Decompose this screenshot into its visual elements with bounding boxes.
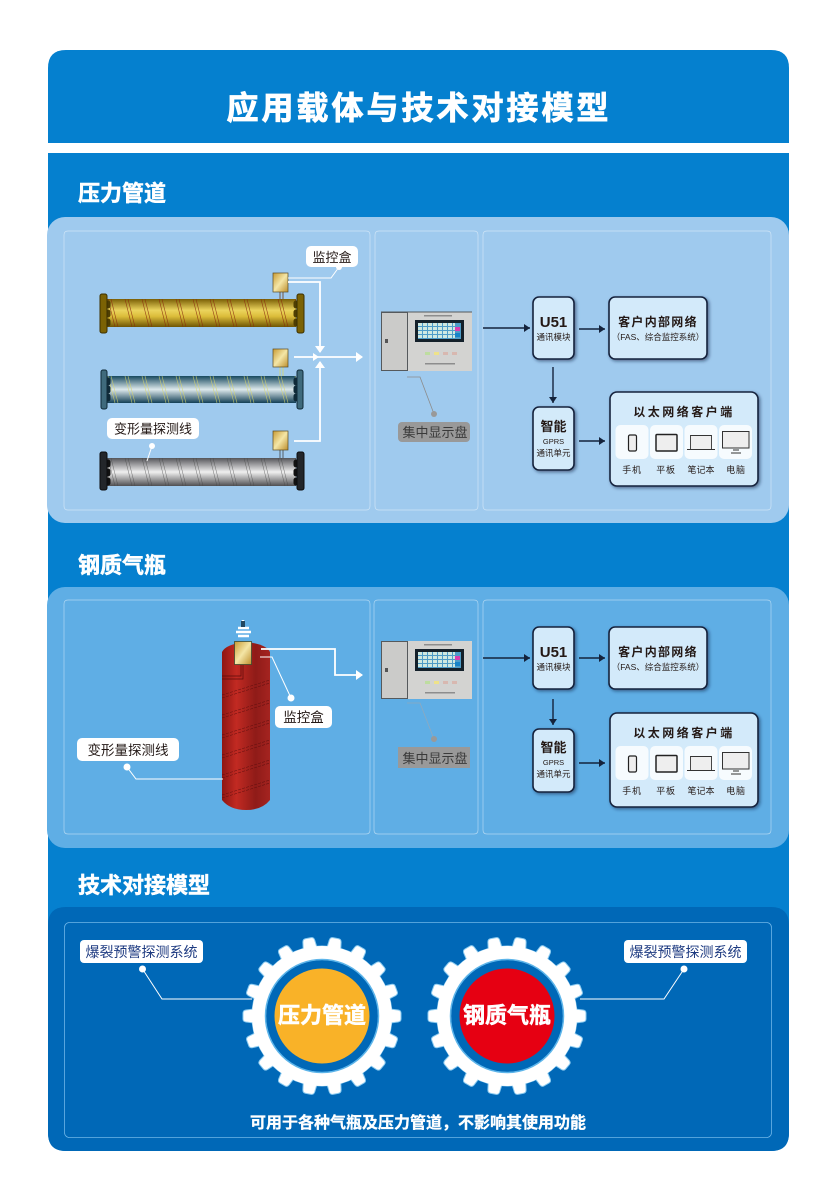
device labels: 笔记本 [687,785,715,796]
smart GPRS unit [533,407,574,470]
U51 module: 通讯模块 [536,332,571,342]
icon: tablet [656,434,677,451]
callout: deformation wire: 变形量探测线 [114,422,192,436]
callout: monitor box: 监控盒 [312,250,352,265]
icon: phone [628,756,636,772]
wiring arrow to display [261,649,362,675]
icon: laptop [687,756,715,770]
central display panel [381,641,472,699]
callout: central display [398,703,470,768]
U51 module: 通讯模块 [536,662,571,672]
customer internal network [609,297,707,359]
callout: monitor box: 监控盒 [283,709,324,725]
steel pipe [100,452,304,490]
callout: deformation wire [107,418,199,461]
gear: pressure pipe [243,937,401,1095]
device labels: 平板 [656,785,676,796]
callout: central display: 集中显示盘 [402,751,468,766]
U51 module: U51 [540,644,567,661]
callout: deformation wire [77,738,223,779]
customer internal network: 客户内部网络 [618,644,698,659]
smart GPRS unit [533,729,574,792]
device labels: 笔记本 [687,464,715,475]
smart GPRS unit: 通讯单元 [536,769,571,779]
device labels: 手机 [622,785,642,796]
teal pipe [101,370,303,409]
ethernet clients [610,713,758,807]
U51 module: U51 [540,314,567,331]
panel: steel cylinders [47,587,789,848]
central display panel [381,312,472,371]
icon: tablet [656,756,677,772]
customer internal network: （FAS、综合监控系统） [612,332,704,342]
icon: desktop [722,752,749,774]
customer internal network [609,627,707,689]
arrows: data flow [483,328,605,441]
callout: central display: 集中显示盘 [402,425,468,440]
smart GPRS unit: 智能 [540,740,567,755]
header band [48,50,789,143]
device labels [622,785,746,796]
callout: deformation wire: 变形量探测线 [88,743,168,758]
icon: desktop [722,432,749,453]
heading: pressure pipes: 压力管道 [78,181,166,206]
footnote: 可用于各种气瓶及压力管道，不影响其使用功能 [250,1113,586,1132]
gear: steel cylinder [428,937,586,1095]
arrows: data flow [483,658,605,763]
device labels: 电脑 [726,785,746,796]
smart GPRS unit: 通讯单元 [536,448,571,458]
gear: steel cylinder: 钢质气瓶 [463,1003,551,1028]
icon: phone [628,435,636,451]
panel: pressure pipes [47,217,789,523]
device labels: 电脑 [726,464,746,475]
callout: left detection system [80,940,252,999]
device labels: 平板 [656,464,676,475]
customer internal network: 客户内部网络 [618,314,698,329]
device labels: 手机 [622,464,642,475]
heading: steel cylinders: 钢质气瓶 [78,553,166,578]
ethernet clients: 以太网络客户端 [633,404,735,419]
panel: technical docking model [48,907,789,1151]
U51 module [533,297,574,359]
callout: monitor box [260,657,332,728]
device labels [622,464,746,475]
customer internal network: （FAS、综合监控系统） [612,662,704,672]
title: 应用载体与技术对接模型 [226,90,612,126]
smart GPRS unit: GPRS [543,437,564,446]
gear: pressure pipe: 压力管道 [278,1003,366,1028]
ethernet clients [610,392,758,486]
monitor boxes [273,273,288,458]
wiring arrows to display [288,282,362,441]
icon: laptop [687,436,715,450]
main blue background [48,153,789,1151]
callout: central display [398,377,470,442]
callout: monitor box [288,246,358,278]
ethernet clients: 以太网络客户端 [633,725,735,740]
smart GPRS unit: 智能 [540,419,567,434]
heading: technical docking model: 技术对接模型 [78,873,210,898]
smart GPRS unit: GPRS [543,758,564,767]
gold pipe [100,294,304,333]
monitor box [234,642,252,664]
red gas cylinder [222,620,270,810]
callout: right detection system: 爆裂预警探测系统 [630,944,742,960]
callout: left detection system: 爆裂预警探测系统 [86,944,198,960]
callout: right detection system [580,940,747,999]
U51 module [533,627,574,689]
